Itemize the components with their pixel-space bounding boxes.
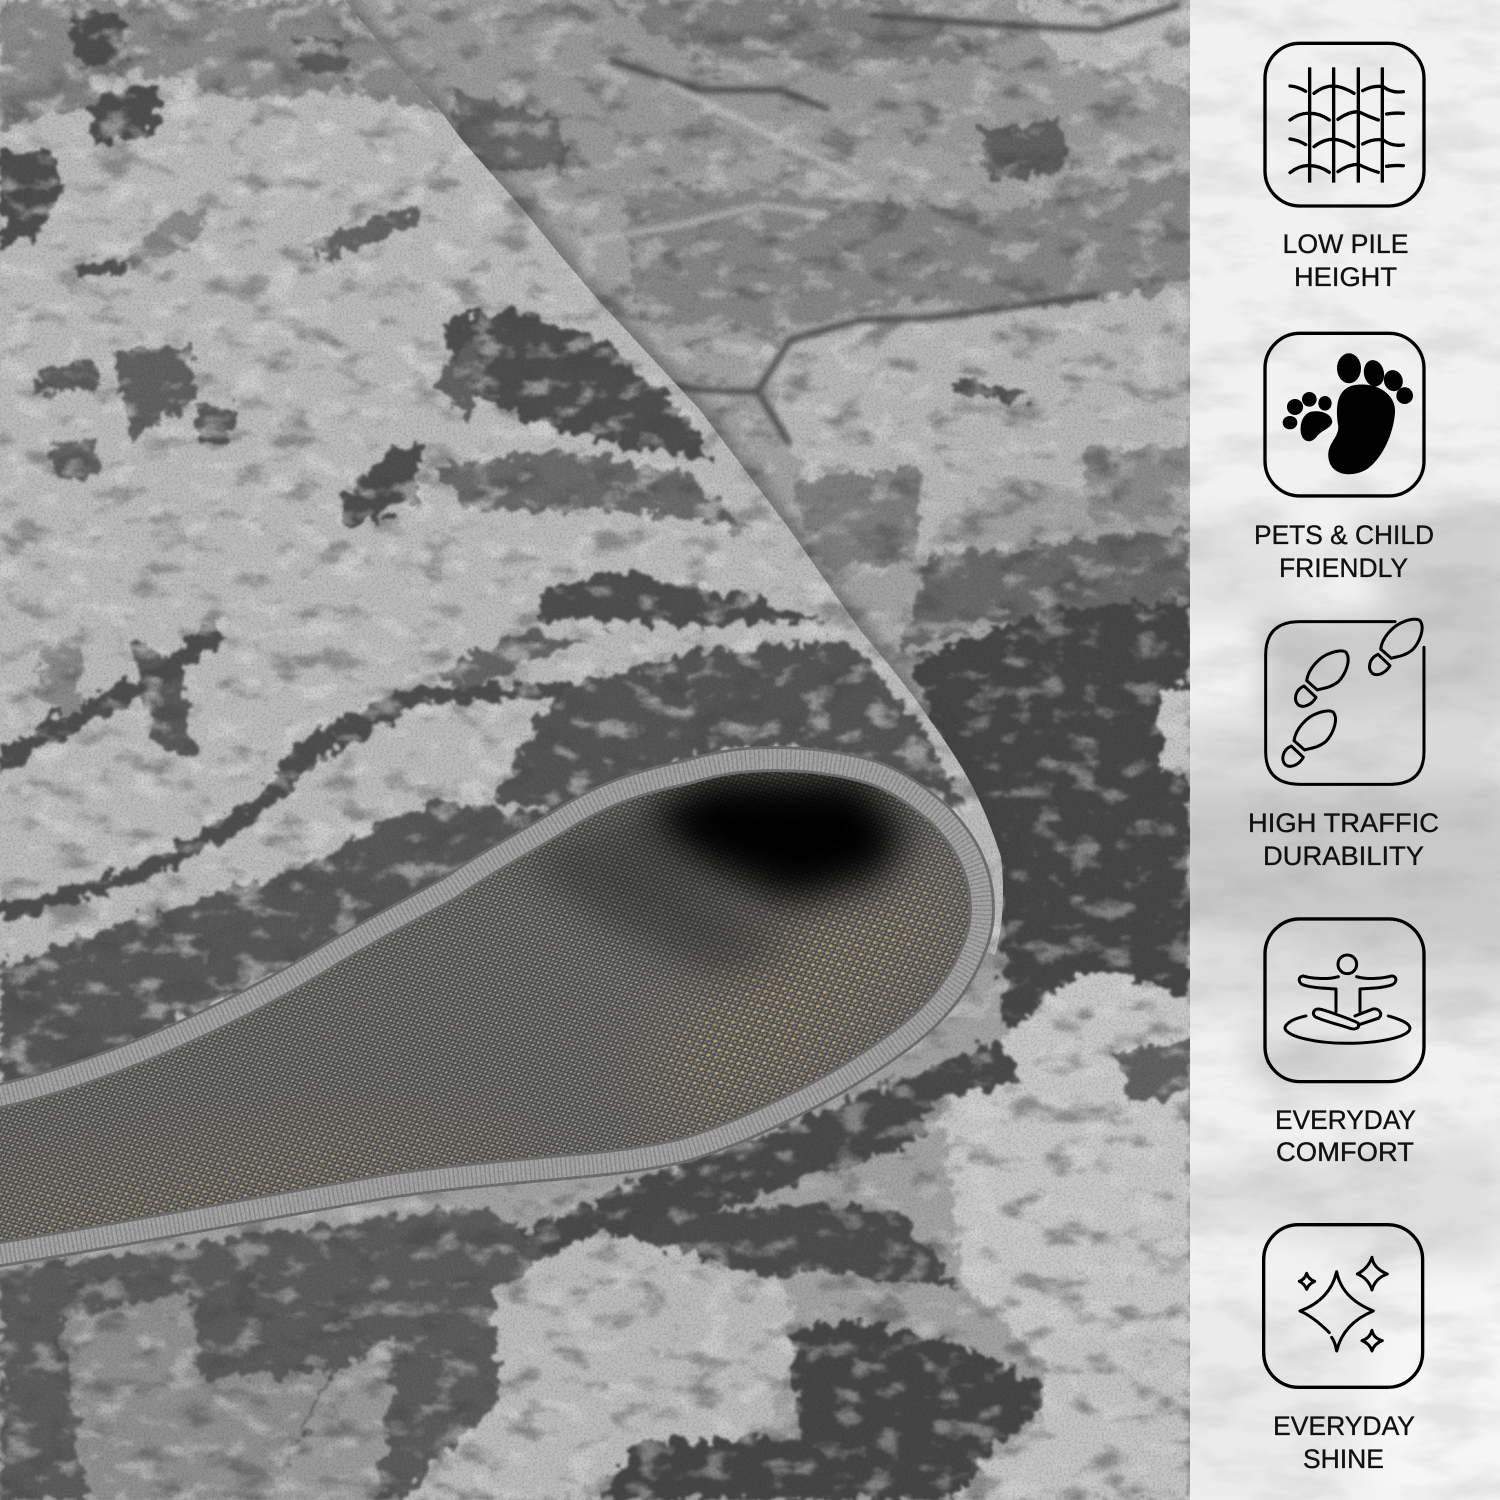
- label: high traffic durability: [1248, 808, 1439, 871]
- icon: high traffic durability: [1266, 619, 1424, 784]
- label: low pile height: LOW PILE: [1282, 229, 1408, 259]
- icon: everyday shine: [1264, 1225, 1423, 1387]
- floor mottling: [0, 0, 1195, 1500]
- label: everyday shine: [1273, 1411, 1415, 1474]
- rug underside: woven backing: [0, 772, 969, 1241]
- icon: everyday comfort: [1265, 919, 1424, 1082]
- label: pets and child friendly: [1254, 520, 1434, 583]
- rug pile texture: [0, 0, 1190, 1500]
- label: everyday comfort: [1275, 1105, 1416, 1167]
- label: pets and child friendly: PETS & CHILD: [1254, 520, 1434, 550]
- label: low pile height: [1282, 229, 1408, 292]
- floor: rug background: [0, 0, 1200, 1500]
- sidebar background: [1170, 0, 1500, 1500]
- icon: low pile height: [1265, 43, 1424, 206]
- label: high traffic durability: HIGH TRAFFIC: [1248, 808, 1439, 838]
- panel: features sidebar: [1170, 0, 1500, 1500]
- label: pets and child friendly: FRIENDLY: [1279, 553, 1408, 583]
- label: everyday comfort: EVERYDAY: [1275, 1105, 1416, 1135]
- label: high traffic durability: DURABILITY: [1263, 841, 1424, 871]
- panel: rolled rug surface: [0, 0, 1010, 1110]
- label: everyday shine: EVERYDAY: [1273, 1411, 1415, 1441]
- icon: pets and child friendly: [1265, 333, 1424, 496]
- label: everyday comfort: COMFORT: [1276, 1137, 1414, 1167]
- rug edge binding: [0, 759, 982, 1255]
- label: low pile height: HEIGHT: [1294, 262, 1397, 292]
- label: everyday shine: SHINE: [1303, 1444, 1384, 1474]
